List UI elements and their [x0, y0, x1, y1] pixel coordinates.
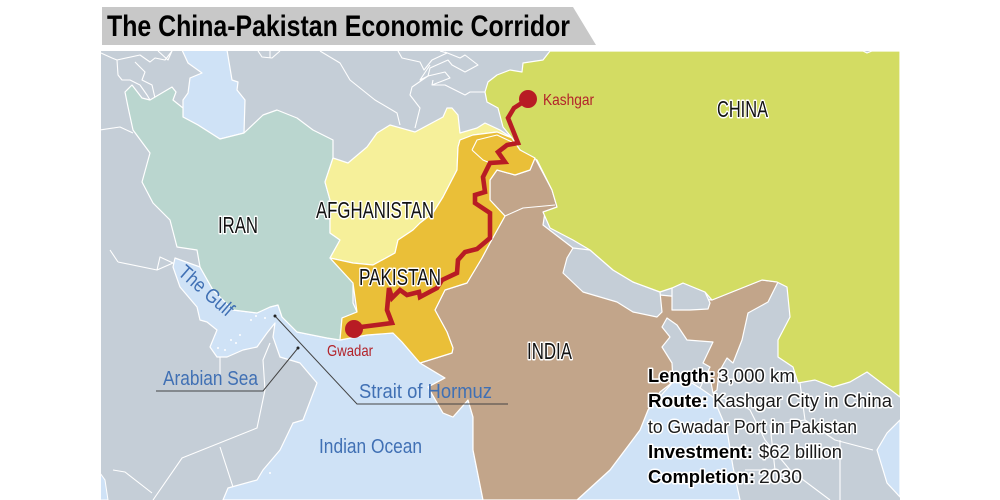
label: Arabian Sea: Arabian Sea	[163, 368, 259, 390]
leader line: Arabian Sea	[156, 346, 300, 391]
label: Strait of Hormuz: Strait of Hormuz	[359, 381, 492, 403]
corridor facts: Route:	[648, 391, 708, 411]
leader line: Strait of Hormuz	[274, 314, 508, 404]
corridor facts: Investment:	[648, 442, 753, 462]
label: The Gulf: The Gulf	[174, 261, 238, 321]
Kashgar marker	[519, 90, 537, 108]
Kashmir divide	[505, 205, 555, 216]
label: Pakistan: PAKISTAN	[359, 264, 441, 290]
corridor facts: $62 billion	[759, 442, 842, 462]
India	[420, 158, 778, 500]
corridor facts: Length:	[648, 366, 715, 386]
CPEC route	[353, 99, 528, 328]
gulf islands	[217, 315, 271, 474]
title banner: The China-Pakistan Economic Corridor	[107, 10, 570, 43]
label: India: INDIA	[527, 338, 572, 364]
neighbouring borders	[100, 51, 873, 500]
corridor facts: 2030	[759, 467, 802, 487]
corridor facts	[648, 366, 893, 487]
Gwadar marker	[345, 320, 363, 338]
corridor facts: 3,000 km	[718, 366, 795, 386]
corridor facts: Kashgar City in China	[713, 391, 893, 411]
label: Kashgar: Kashgar	[543, 92, 595, 109]
Afghanistan	[325, 108, 512, 265]
Bay of Bengal water	[577, 382, 740, 500]
Nepal	[563, 248, 662, 317]
Bangladesh	[662, 318, 713, 388]
Pakistan	[330, 132, 535, 363]
map	[100, 50, 900, 500]
China	[485, 51, 900, 397]
Arabian Sea and Indian Ocean water	[173, 258, 483, 500]
Caspian Sea	[182, 50, 245, 139]
label: Gwadar: Gwadar	[327, 343, 374, 360]
Gulf of Thailand water	[877, 420, 900, 497]
label: Indian Ocean: Indian Ocean	[319, 436, 422, 458]
label: China: CHINA	[717, 96, 768, 122]
label: Iran: IRAN	[218, 212, 258, 238]
label: Afghanistan: AFGHANISTAN	[316, 197, 434, 223]
Iran	[125, 85, 357, 340]
Pakistan northern areas border	[472, 135, 512, 163]
corridor facts: to Gwadar Port in Pakistan	[648, 417, 857, 437]
Bhutan	[672, 283, 710, 310]
corridor facts: Completion:	[648, 467, 755, 487]
Red Sea corner	[100, 473, 108, 500]
